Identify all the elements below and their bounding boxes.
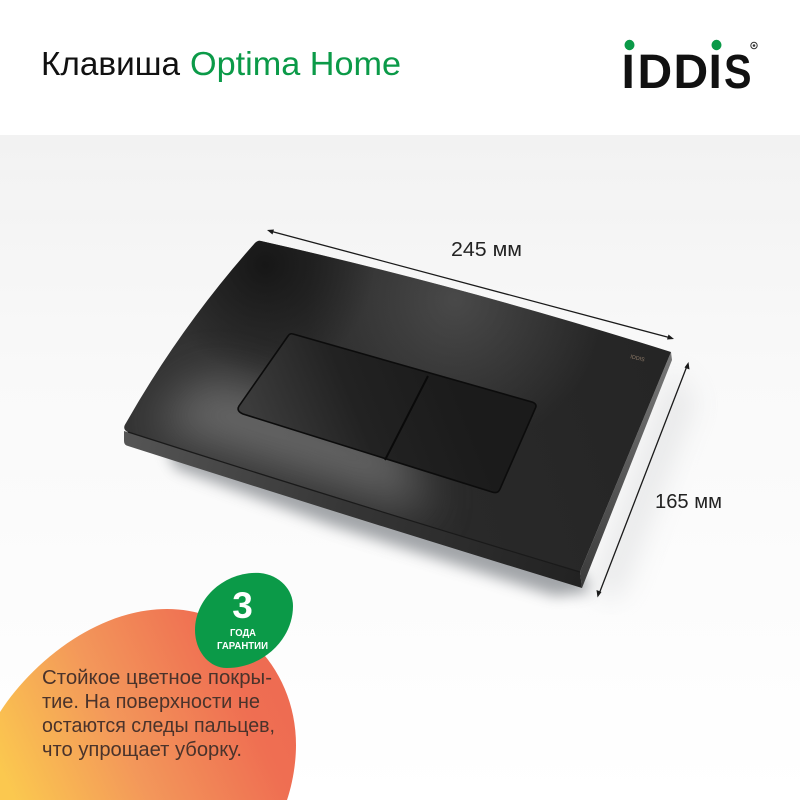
callout text: что упрощает уборку. [42, 739, 242, 761]
panel: gradient callout [0, 609, 296, 800]
callout text: остаются следы пальцев, [42, 715, 275, 737]
right shadow [590, 370, 695, 600]
badge: 3-year warranty: ГОДА [230, 627, 256, 639]
callout text: Стойкое цветное покры- [42, 667, 272, 689]
badge: 3-year warranty: ГАРАНТИИ [217, 640, 268, 652]
right edge [580, 352, 672, 588]
arrow: width dimension [267, 230, 674, 340]
label: 245 mm: 245 мм [451, 239, 522, 261]
front edge highlight [128, 432, 580, 572]
logo: IDDIS [622, 40, 757, 99]
plate shadow [165, 445, 590, 596]
title: Клавиша [41, 45, 181, 82]
brand mark on plate: IDDIS [630, 354, 646, 364]
logo: IDDIS: S [724, 45, 752, 99]
button divider [385, 376, 428, 460]
label: 165 mm: 165 мм [655, 491, 722, 513]
logo: IDDIS: IDDI [622, 46, 722, 99]
badge: 3-year warranty [195, 573, 293, 668]
badge: 3-year warranty: 3 [232, 585, 253, 626]
surface lighting [150, 240, 566, 522]
callout text: тие. На поверхности не [42, 691, 260, 713]
title: Optima Home [190, 45, 401, 82]
callout text [42, 667, 275, 761]
front edge [124, 431, 582, 588]
flush plate product [100, 220, 700, 600]
arrow: height dimension [596, 362, 690, 598]
flush buttons [238, 334, 536, 493]
title [41, 45, 401, 82]
plate top surface [124, 241, 671, 572]
